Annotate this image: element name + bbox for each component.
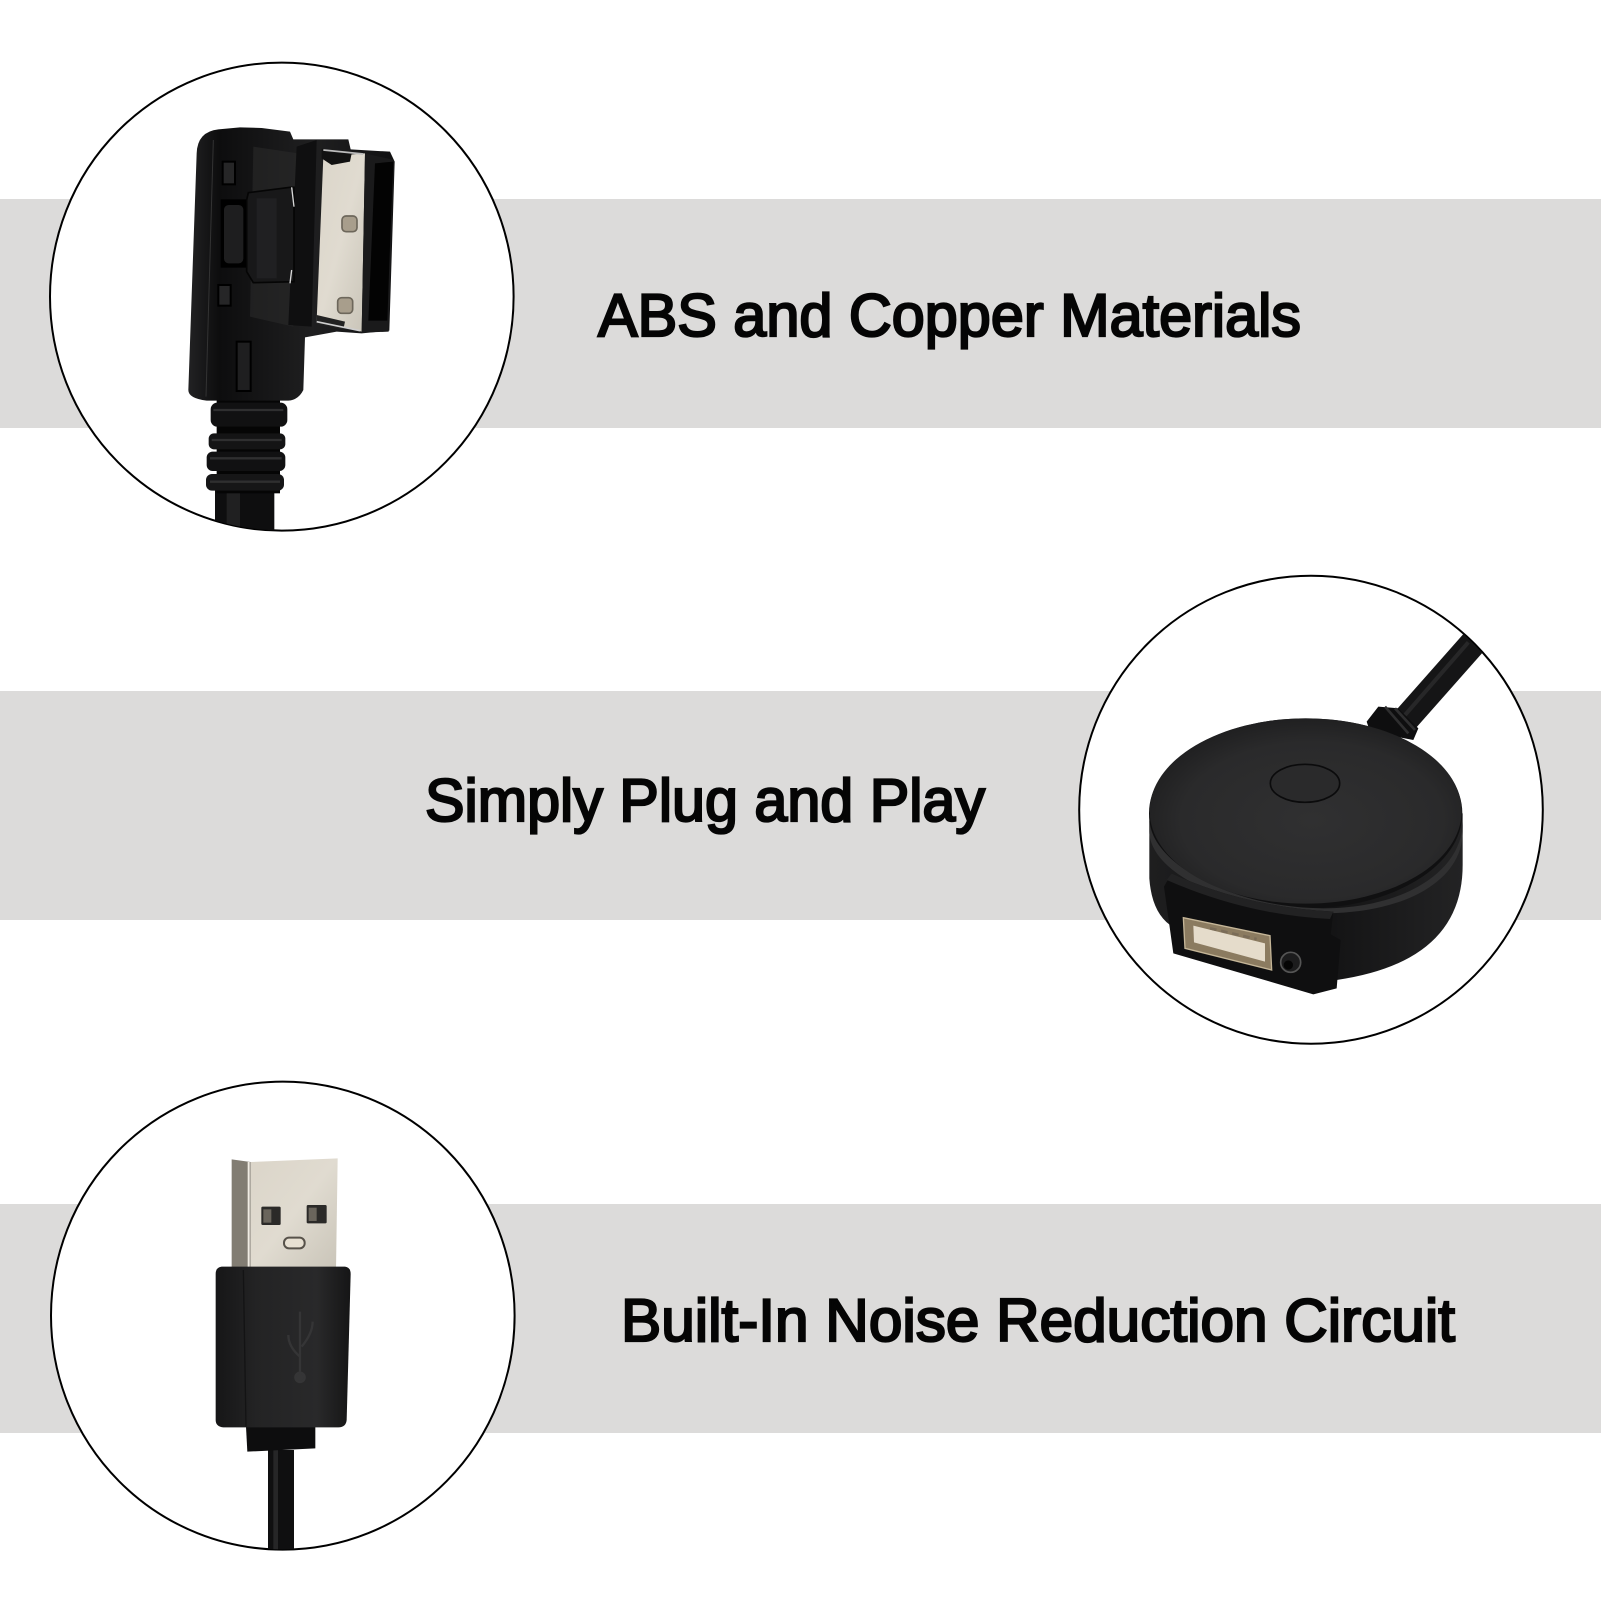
icon: embossed USB symbol	[288, 1312, 313, 1382]
heading: ABS and Copper Materials: ABS and Copper Materials	[598, 282, 1301, 349]
heading: Built-In Noise Reduction Circuit: Built-In Noise Reduction Circuit	[621, 1287, 1455, 1354]
icon: round receiver with USB port	[1149, 641, 1475, 994]
band 2	[0, 691, 1601, 920]
circle: USB plug photo	[51, 1082, 515, 1553]
icon: USB-A plug	[216, 1158, 351, 1553]
band 1	[0, 199, 1601, 428]
icon: MMI angled connector	[188, 127, 395, 537]
circle: connector photo	[50, 63, 514, 537]
panel: ABS and Copper Materials	[0, 63, 1601, 537]
heading: Simply Plug and Play: Simply Plug and Play	[425, 767, 985, 834]
panel: Built-In Noise Reduction Circuit	[0, 1082, 1601, 1553]
panel: Simply Plug and Play	[0, 576, 1601, 1044]
circle: receiver photo	[1079, 576, 1543, 1044]
band 3	[0, 1204, 1601, 1433]
